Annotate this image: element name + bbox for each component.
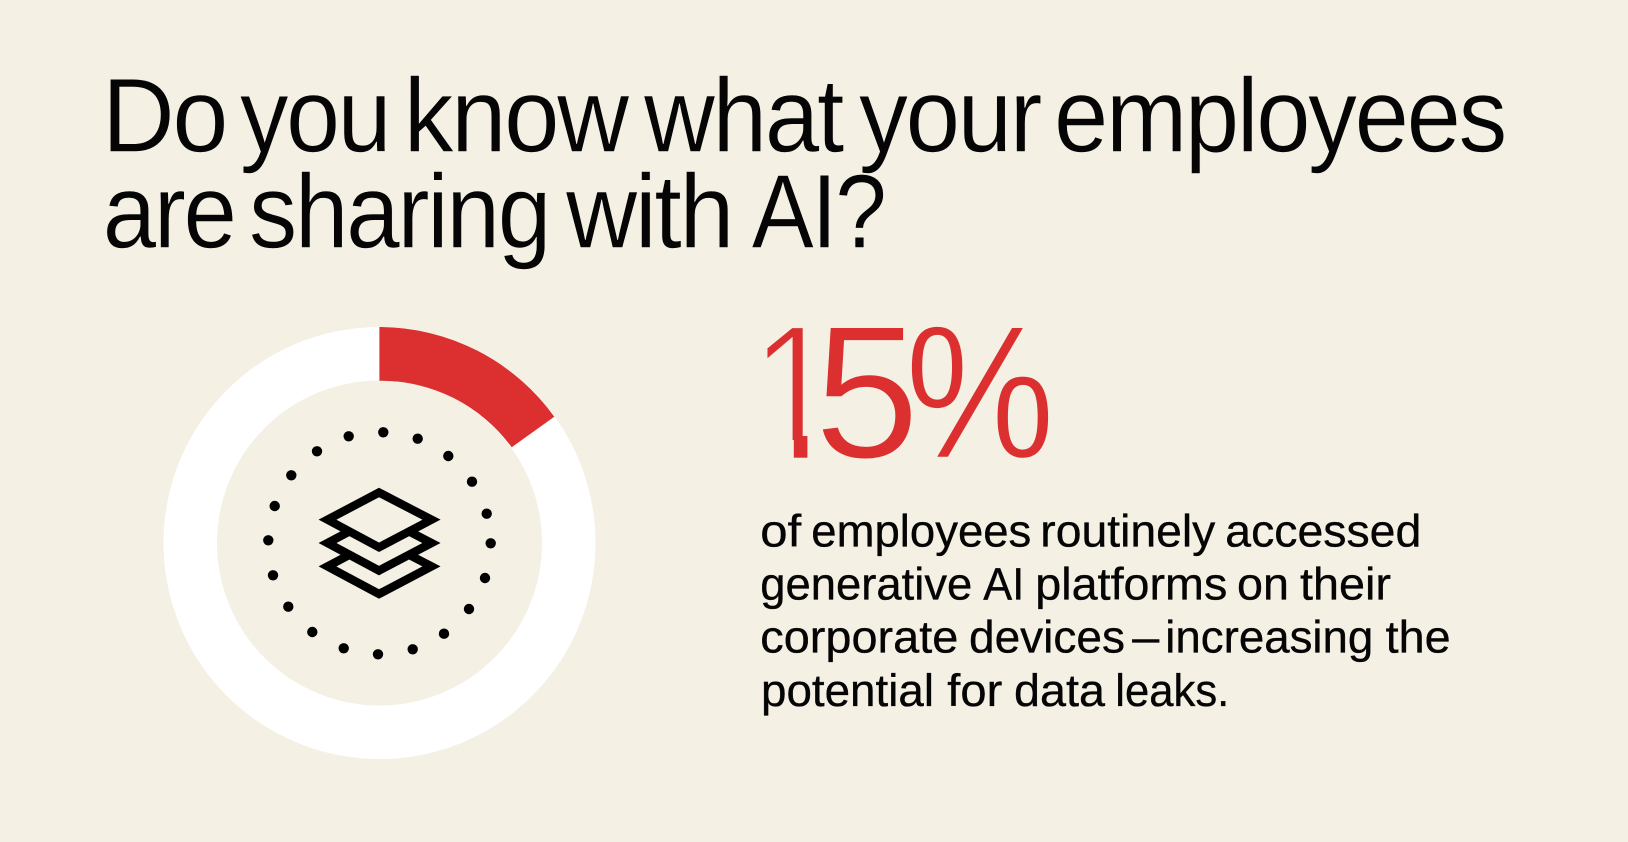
title bbox=[102, 58, 1505, 271]
description text: on bbox=[1237, 558, 1289, 609]
title: what bbox=[643, 58, 844, 175]
description text: increasing bbox=[1165, 612, 1373, 663]
title: know bbox=[404, 58, 630, 175]
description text: AI bbox=[983, 558, 1024, 609]
donut chart: 15% bbox=[190, 327, 569, 732]
description text: the bbox=[1386, 612, 1451, 663]
dotted circle bbox=[263, 427, 496, 660]
title: are bbox=[103, 154, 235, 271]
title: you bbox=[240, 58, 389, 175]
description text: devices bbox=[969, 612, 1125, 663]
description text: routinely bbox=[1040, 506, 1216, 557]
title: your bbox=[859, 58, 1041, 175]
icon: stacked layers bbox=[328, 492, 432, 594]
donut red segment bbox=[379, 327, 554, 447]
statistic: 15%: 5 bbox=[814, 287, 920, 499]
description text: generative bbox=[760, 558, 972, 609]
statistic: 15%: 1 bbox=[750, 284, 840, 499]
title: with bbox=[565, 154, 732, 271]
title: Do bbox=[102, 58, 226, 175]
description text bbox=[760, 506, 1451, 716]
description text: for bbox=[947, 665, 1002, 716]
title: sharing bbox=[249, 154, 549, 271]
description text: platforms bbox=[1035, 558, 1227, 609]
description text: leaks. bbox=[1115, 665, 1229, 716]
description text: – bbox=[1132, 612, 1160, 663]
description text: corporate bbox=[760, 612, 958, 663]
description text: potential bbox=[761, 665, 934, 716]
description text: employees bbox=[811, 506, 1031, 557]
donut track bbox=[190, 354, 569, 732]
description text: their bbox=[1300, 558, 1391, 609]
description text: data bbox=[1014, 665, 1106, 716]
statistic: 15%: % bbox=[905, 287, 1055, 499]
statistic: 15% bbox=[767, 326, 1048, 458]
title: employees bbox=[1054, 58, 1505, 175]
description text: of bbox=[760, 506, 802, 557]
description text: accessed bbox=[1225, 506, 1421, 557]
title: AI? bbox=[752, 154, 885, 271]
